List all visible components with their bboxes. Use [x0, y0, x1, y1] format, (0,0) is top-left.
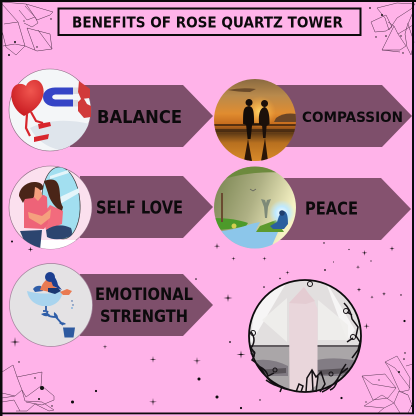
decoration: crystal bottom right [362, 356, 413, 413]
title box: BENEFITS OF ROSE QUARTZ TOWER [72, 14, 343, 32]
icon: woman hugging mirror reflection [9, 166, 92, 250]
panel: self love [9, 166, 213, 250]
decoration: crystal bottom left [2, 361, 54, 411]
arrow: peace [280, 178, 411, 240]
icon: meditating person by stream [214, 166, 296, 250]
decoration: stars and dots [10, 240, 406, 409]
title box [58, 8, 360, 35]
panel: emotional strength [10, 264, 213, 346]
decoration: crystal top left [0, 2, 53, 56]
icon: couple at sunset [214, 79, 296, 161]
icon: heart and magnet [9, 69, 91, 151]
label: emotional: EMOTIONAL [95, 285, 193, 304]
arrow: compassion [275, 85, 412, 147]
label: compassion: COMPASSION [302, 110, 403, 126]
label: self love: SELF LOVE [96, 198, 183, 218]
panel: balance [9, 69, 213, 151]
vine ornament [251, 303, 360, 392]
panel: rose quartz tower photo [248, 280, 362, 392]
arrow: self love [80, 176, 213, 238]
label: balance: BALANCE [97, 107, 182, 128]
label: peace: PEACE [305, 200, 358, 220]
arrow: balance [70, 85, 213, 147]
panel: compassion [214, 79, 412, 161]
panel: peace [214, 166, 411, 250]
arrow: emotional strength [80, 274, 213, 336]
decoration: crystal top right [369, 3, 415, 55]
label: strength: STRENGTH [100, 307, 188, 326]
icon: woman watering flower [10, 264, 92, 346]
